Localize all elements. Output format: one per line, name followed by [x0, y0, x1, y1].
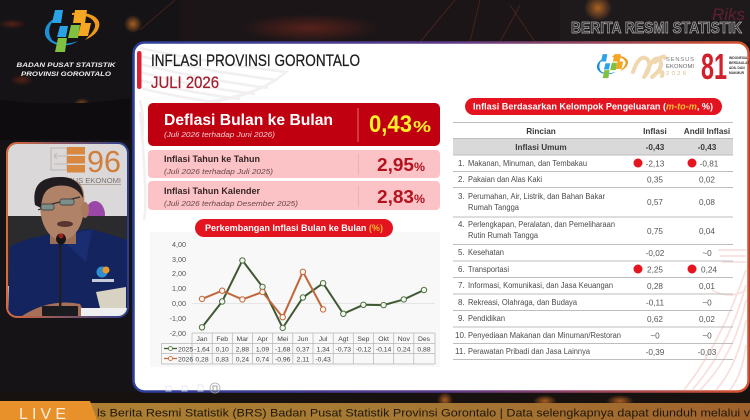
table rows: labels: 9. — [458, 314, 465, 323]
table rows: values: -0,81 — [700, 160, 719, 168]
table rows: values: 0,28 — [647, 282, 663, 291]
chart data table: -1,68 — [275, 346, 291, 354]
y axis labels: -2,00 — [170, 329, 186, 338]
icons: viewer toolbar — [166, 383, 220, 393]
heading: slide title — [137, 51, 360, 92]
table rows: values: ~0 — [702, 298, 712, 308]
table header: Rincian — [526, 127, 556, 136]
table rows: labels: 4. — [458, 220, 465, 229]
chart data table: Sep — [357, 336, 370, 343]
heading: slide title: INFLASI PROVINSI GORONTALO — [151, 51, 360, 70]
table rows: labels: Rutin Rumah Tangga — [468, 231, 539, 240]
table rows: labels: Rumah Tangga — [468, 203, 520, 212]
logos: BPS, Sensus Ekonomi, 81: INDONESIA — [729, 56, 748, 60]
table rows: values: 0,24 — [701, 266, 717, 274]
table rows: values: ~0 — [702, 332, 712, 340]
table header: Andil Inflasi — [684, 127, 730, 136]
table rows: labels: Perumahan, Air, Listrik, dan Bahan Bakar — [468, 192, 605, 201]
table rows: values: -0,03 — [698, 348, 717, 357]
card: Deflasi Bulan ke Bulan: % — [413, 119, 431, 136]
table rows: values — [646, 160, 719, 357]
chart: Perkembangan Inflasi Bulan ke Bulan — [150, 219, 440, 367]
card: Deflasi Bulan ke Bulan: 0,43 — [369, 111, 412, 138]
table rows: values: 0,04 — [699, 227, 715, 236]
heading: slide title: JULI 2026 — [151, 73, 219, 92]
table rows: labels: 8. — [458, 298, 465, 307]
chart data table: Jan — [197, 336, 208, 343]
chart data table: Jul — [319, 336, 328, 343]
table rows: labels: Pendidikan — [468, 314, 505, 323]
chart data table: -0,12 — [356, 346, 371, 354]
table rows: values: -0,11 — [646, 298, 664, 308]
table rows: labels: 6. — [458, 265, 465, 274]
ticker: running text — [0, 403, 750, 420]
table header: -0,43 — [698, 143, 717, 152]
chart data table: Des — [418, 336, 431, 343]
y axis labels: 3,00 — [172, 255, 186, 264]
logos: BPS, Sensus Ekonomi, 81: ADIL DAN — [729, 66, 745, 70]
table rows: labels: Perawatan Pribadi dan Jasa Lainnya — [468, 347, 591, 356]
table heading pill: Inflasi Berdasarkan Kelompok Pengeluaran ( m-to-m, %) — [473, 102, 713, 112]
chart data table — [162, 333, 435, 364]
table header — [515, 127, 730, 152]
table rows: values: -0,39 — [646, 348, 665, 357]
table rows: labels: Makanan, Minuman, dan Tembakau — [468, 159, 587, 168]
markers: red dots — [634, 158, 696, 274]
y axis labels: 1,00 — [172, 284, 186, 293]
chart data table: 0,24 — [236, 356, 249, 364]
card: Inflasi Tahun Kalender: (Juli 2026 terhadap Desember 2025) — [164, 199, 299, 208]
table rows: values: 2,25 — [647, 266, 663, 274]
logos: BPS, Sensus Ekonomi, 81: EKONOMI — [666, 64, 694, 70]
y axis labels: 2,00 — [172, 269, 186, 278]
chart data table: 1,34 — [316, 346, 330, 354]
logos: BPS, Sensus Ekonomi, 81: MAKMUR — [729, 71, 745, 75]
chart data table: Mei — [277, 336, 289, 343]
table rows: labels: Kesehatan — [468, 248, 504, 257]
chart data table: 2025 — [178, 346, 193, 354]
heading: agency name — [16, 62, 117, 78]
chart title pill: Perkembangan Inflasi Bulan ke Bulan (%) — [205, 223, 383, 233]
y axis labels — [170, 240, 186, 338]
chart data table: 0,24 — [397, 346, 411, 354]
card: Deflasi Bulan ke Bulan: Deflasi Bulan ke Bulan — [164, 112, 333, 129]
panel: main slide — [134, 42, 748, 392]
chart data table: 2026 — [178, 356, 193, 364]
card: Inflasi Tahun ke Tahun: 2,95 — [377, 155, 414, 175]
chart data table: 0,74 — [256, 356, 269, 364]
heading: Berita Resmi Statistik — [571, 5, 746, 37]
card: Inflasi Tahun Kalender: 2,83 — [377, 187, 414, 207]
table heading pill — [465, 98, 722, 115]
chart data table: Jun — [297, 336, 309, 343]
table rows: values: 0,02 — [699, 315, 715, 324]
table rows: values: 0,01 — [699, 282, 715, 291]
photo: speaker: 96 — [87, 144, 121, 179]
logos: BPS, Sensus Ekonomi, 81: BERDAULAT — [729, 61, 749, 65]
table rows: values: 0,75 — [647, 227, 663, 236]
table header: Inflasi — [643, 127, 667, 136]
chart data table: Okt — [378, 336, 389, 343]
table rows: values: ~0 — [650, 332, 660, 340]
chart data table: 0,83 — [216, 356, 229, 364]
table rows: labels: 5. — [458, 248, 465, 257]
photo: speaker — [7, 143, 128, 317]
chart data table: Agt — [338, 336, 349, 343]
table rows: values: ~0 — [702, 249, 712, 258]
chart data table: 2,88 — [236, 346, 249, 354]
line: 2025 — [199, 258, 427, 331]
chart data table: Feb — [216, 336, 228, 343]
y axis labels: -1,00 — [170, 314, 186, 323]
y axis labels: 4,00 — [172, 240, 186, 249]
table rows: values: 0,08 — [699, 198, 715, 207]
card: Deflasi Bulan ke Bulan — [148, 103, 440, 146]
table rows: labels: Rekreasi, Olahraga, dan Budaya — [468, 298, 578, 307]
ticker: running text: ls Berita Resmi Statistik (BRS) Badan Pusat Statistik Provinsi Gorontalo | Data selengkapnya dapat diunduh melalui v — [97, 408, 750, 420]
chart data table: 0,37 — [296, 346, 310, 354]
chart data table: 1,09 — [256, 346, 269, 354]
chart data table: -0,43 — [315, 356, 331, 364]
card: Inflasi Tahun Kalender — [148, 181, 440, 210]
table rows: labels: 11. — [455, 347, 466, 356]
card: Inflasi Tahun ke Tahun: (Juli 2026 terhadap Juli 2025) — [164, 167, 273, 176]
chart data table: 2,11 — [297, 356, 309, 364]
card: Inflasi Tahun ke Tahun: % — [414, 160, 425, 174]
badge: LIVE — [0, 401, 97, 420]
chart data table: 0,10 — [216, 346, 229, 354]
table header: -0,43 — [646, 143, 665, 152]
chart data table: -0,14 — [376, 346, 392, 354]
table header: Inflasi Umum — [515, 143, 567, 152]
chart data table: Apr — [257, 336, 269, 343]
table rows: labels: 10. — [455, 331, 466, 340]
heading: agency name: BADAN PUSAT STATISTIK — [16, 62, 117, 69]
card: Inflasi Tahun Kalender: Inflasi Tahun Kalender — [164, 186, 260, 196]
table rows: labels: Informasi, Komunikasi, dan Jasa Keuangan — [468, 281, 613, 290]
table rows: values: 0,62 — [647, 315, 663, 324]
chart data table: -0,73 — [336, 346, 351, 354]
logos: BPS, Sensus Ekonomi, 81: 81 — [701, 46, 727, 87]
logo: BPS — [45, 10, 99, 52]
card: Inflasi Tahun ke Tahun: Inflasi Tahun ke Tahun — [164, 154, 260, 164]
logos: BPS, Sensus Ekonomi, 81: 2026 — [666, 71, 686, 77]
card: Inflasi Tahun Kalender: % — [414, 192, 425, 206]
table rows: labels: Penyediaan Makanan dan Minuman/Restoran — [468, 331, 621, 340]
table rows: labels: 2. — [458, 175, 465, 184]
logos: BPS, Sensus Ekonomi, 81: SENSUS — [666, 57, 694, 63]
chart data table: Mar — [237, 336, 249, 343]
chart data table: -1,64 — [194, 346, 210, 354]
table rows: labels: Pakaian dan Alas Kaki — [468, 175, 542, 184]
chart data table: -0,96 — [275, 356, 291, 364]
chart data table: Nov — [398, 336, 410, 343]
table: inflasi per kelompok pengeluaran — [453, 122, 733, 360]
y axis labels: 0,00 — [172, 299, 186, 308]
photo: speaker: SENSUS EKONOMI — [52, 176, 121, 185]
table rows: labels: 1. — [458, 159, 465, 168]
card: Inflasi Tahun ke Tahun — [148, 150, 440, 178]
line: 2026 — [199, 269, 326, 320]
table rows: values: -2,13 — [646, 160, 665, 168]
table rows: labels — [455, 159, 621, 356]
table rows: values: -0,02 — [646, 249, 665, 258]
heading: Berita Resmi Statistik: Riks — [712, 5, 746, 24]
chart data table: 0,28 — [195, 356, 209, 364]
card: Deflasi Bulan ke Bulan: (Juli 2026 terhadap Juni 2026) — [164, 130, 276, 139]
chart data table: 0,88 — [417, 346, 431, 354]
table rows: labels: Perlengkapan, Peralatan, dan Pemeliharaan — [468, 220, 615, 229]
chart title pill — [195, 219, 393, 237]
logos: BPS, Sensus Ekonomi, 81 — [597, 46, 749, 87]
table rows: labels: 7. — [458, 281, 465, 290]
table rows: labels: 3. — [458, 192, 465, 201]
table rows: values: 0,57 — [647, 198, 663, 207]
table rows: values: 0,35 — [647, 176, 663, 184]
table rows: values: 0,02 — [699, 176, 715, 184]
table rows: labels: Transportasi — [468, 265, 509, 274]
heading: agency name: PROVINSI GORONTALO — [21, 71, 112, 78]
